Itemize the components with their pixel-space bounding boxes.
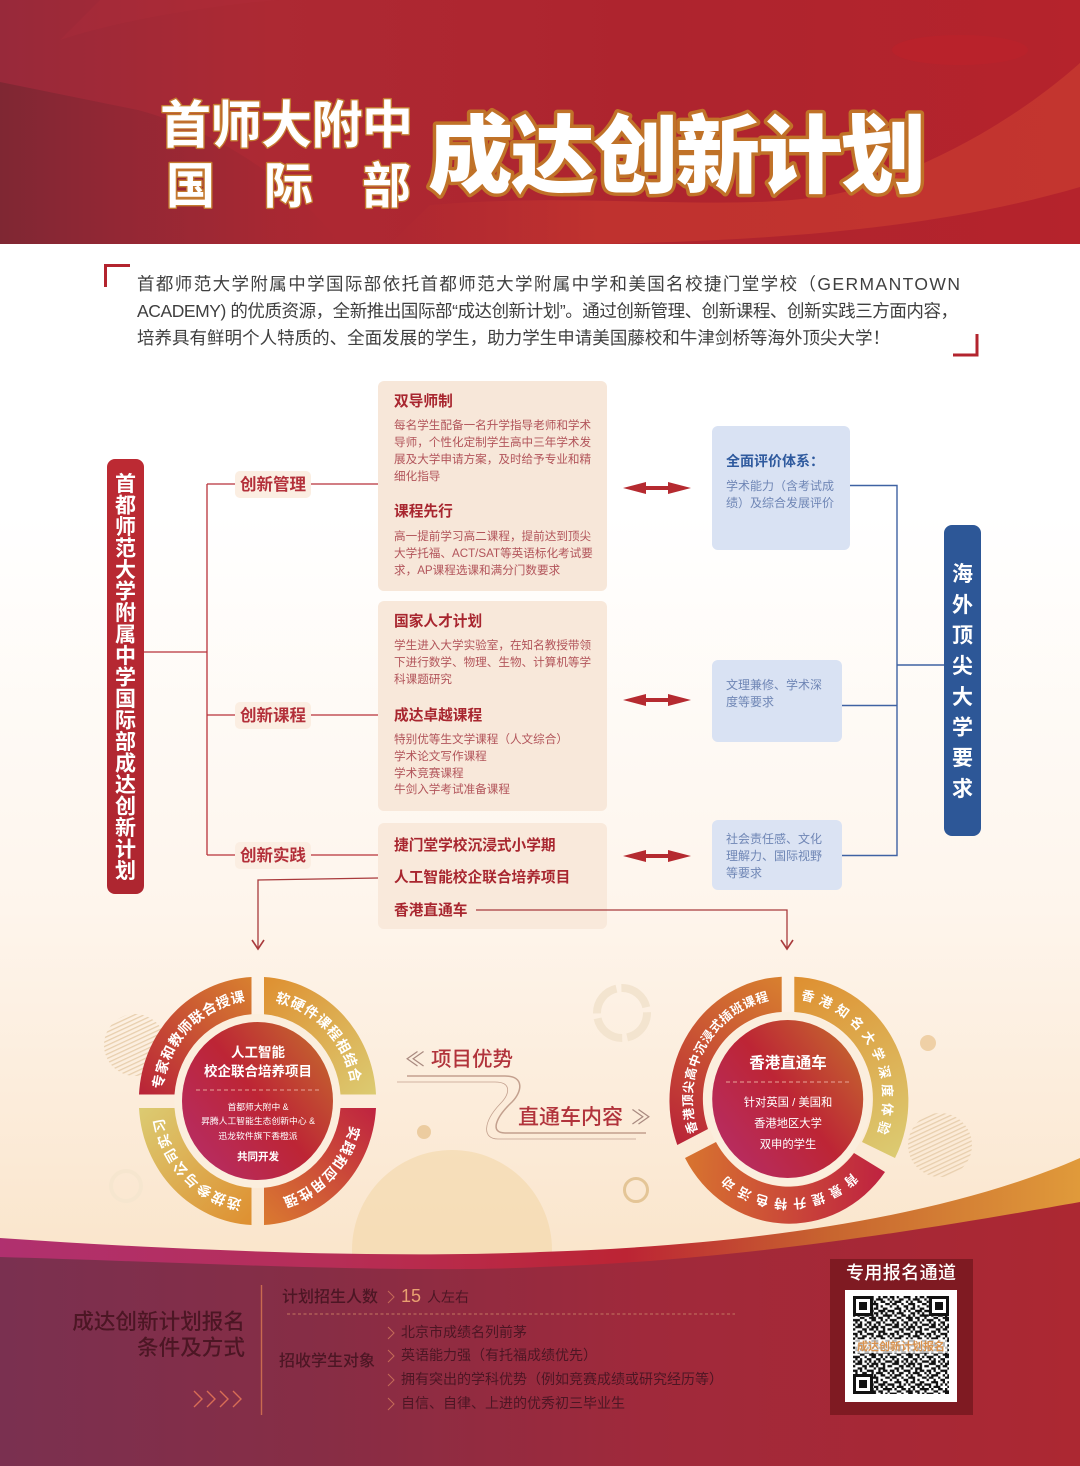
left vertical bar: 首都师范大学附属中学国际部成达创新计划 [115,473,136,883]
panel: 创新课程 content: 学术论文写作课程 [394,749,487,763]
target students: 招收学生对象 [279,1351,375,1370]
panel: 创新管理 content: 求，AP课程选课和满分门数要求 [394,563,561,577]
middle heading: 项目优势: 项目优势 [431,1048,513,1071]
chevrons [194,1391,241,1407]
center disc: 人工智能 [231,1044,285,1060]
vertical divider [260,1285,262,1415]
panel: 全面评价体系: 绩）及综合发展评价 [726,495,834,510]
panel: 创新课程 content: 学生进入大学实验室，在知名教授带领 [394,638,592,652]
panel: 社会责任感: 社会责任感、文化 [726,831,822,846]
panel: 创新管理 content [378,381,607,591]
dotted divider [287,1313,735,1315]
panel: 全面评价体系: 学术能力（含考试成 [726,478,834,493]
center disc: 针对英国 / 美国和 [744,1095,832,1109]
right donut: 香港直通车 [669,976,908,1224]
target students: 英语能力强（有托福成绩优先） [401,1347,597,1363]
target students: 拥有突出的学科优势（例如竞赛成绩或研究经历等） [401,1371,723,1387]
double arrow 1 [623,482,691,494]
panel: 创新课程 content: 下进行数学、物理、生物、计算机等学 [394,655,591,669]
QR panel: 专用报名通道 [846,1263,956,1283]
label: 创新实践 [235,842,311,869]
segment: 专家和教师联合授课: 专家和教师联合授课 [152,990,245,1088]
panel: 创新课程 content: 特别优等生文学课程（人文综合） [394,732,568,746]
arrow: to right donut [476,910,793,949]
intro text block: 培养具有鲜明个人特质的、全面发展的学生，助力学生申请美国藤校和牛津剑桥等海外顶尖大学！ [137,328,890,348]
center disc: 昇腾人工智能生态创新中心 & [201,1115,315,1126]
panel: 创新管理 content: 课程先行 [394,503,453,520]
segment: 香港顶尖高中沉浸式插班课程 [669,976,782,1145]
intro text block: ACADEMY) 的优质资源，全新推出国际部“成达创新计划”。通过创新管理、创新课程、创新实践三方面内容， [137,301,958,321]
double arrow 2 [623,694,691,706]
center disc [182,1022,333,1180]
panel: 全面评价体系 [712,426,850,550]
panel: 创新课程 content: 科课题研究 [394,672,452,686]
segment: 软硬件课程相结合: 软硬件课程相结合 [276,991,362,1081]
label: 创新课程 [235,702,311,729]
segment: 选拔参与公司实习: 选拔参与公司实习 [152,1120,242,1212]
target students: 自信、自律、上进的优秀初三毕业生 [401,1395,625,1411]
panel: 社会责任感 [712,820,842,890]
panel: 创新实践 content: 捷门堂学校沉浸式小学期 [394,836,556,854]
intro text block: 首都师范大学附属中学国际部依托首都师范大学附属中学和美国名校捷门堂学校（GERMANTOWN [137,274,960,294]
panel: 文理兼修: 度等要求 [726,694,774,709]
label: 创新管理: 创新管理 [240,474,306,494]
title: school name: 国 [166,160,215,214]
segment: 实践和应用性强 [264,1108,376,1225]
middle curved divider [397,1076,646,1139]
footer [0,1158,1080,1466]
label: 创新实践: 创新实践 [240,845,306,865]
panel: 创新管理 content: 大学托福、ACT/SAT等英语标化考试要 [394,546,593,560]
center disc: 共同开发 [237,1150,279,1163]
panel: 创新实践 content: 人工智能校企联合培养项目 [394,868,570,886]
segment: 选拔参与公司实习 [139,1108,252,1225]
panel: 创新实践 content [378,823,607,929]
plan enrolment [282,1286,469,1306]
center disc: 首都师大附中 & [227,1101,289,1112]
plan enrolment: 15 [401,1286,421,1306]
center disc: 迅龙软件旗下香橙派 [218,1130,298,1141]
double arrow 3 [623,850,691,862]
panel: 创新管理 content: 每名学生配备一名升学指导老师和学术 [394,418,592,432]
segment: 香港知名大学深度体验: 香港知名大学深度体验 [802,990,894,1135]
right vertical bar: 海外顶尖大学要求 [952,563,973,801]
right connector tree [842,486,944,856]
right vertical bar [944,525,981,836]
label: 创新课程: 创新课程 [240,705,306,725]
panel: 文理兼修 [712,660,842,742]
registration heading: 条件及方式 [137,1335,245,1360]
left donut: 人工智能校企联合培养项目 [139,977,376,1225]
plan enrolment: 计划招生人数 [282,1288,378,1306]
registration heading [72,1309,245,1360]
panel: 创新管理 content: 展及大学申请方案，及时给予专业和精 [394,452,592,466]
middle heading: 项目优势: ≪ [405,1049,425,1071]
intro text block [137,274,960,348]
title: school name: 首师大附中 [160,97,413,154]
header banner [0,0,1080,244]
panel: 创新课程 content: 国家人才计划 [394,612,482,630]
title: school name [160,97,413,214]
segment: 背景提升特色活动 [685,1142,885,1224]
panel: 创新课程 content [378,601,607,811]
QR code: 成达创新计划报名 [857,1339,945,1353]
middle heading: 直通车内容: ≫ [631,1107,651,1129]
segment: 香港顶尖高中沉浸式插班课程: 香港顶尖高中沉浸式插班课程 [682,990,769,1134]
left connector tree [144,484,378,855]
left vertical bar [107,459,144,894]
segment: 软硬件课程相结合 [264,977,376,1094]
target students: 北京市成绩名列前茅 [401,1324,527,1340]
panel: 创新课程 content: 学术竞赛课程 [394,766,464,780]
registration heading: 成达创新计划报名 [72,1309,245,1334]
panel: 创新管理 content: 导师，个性化定制学生高中三年学术发 [394,435,592,449]
panel: 创新管理 content: 高一提前学习高二课程，提前达到顶尖 [394,529,592,543]
panel: 社会责任感: 等要求 [726,866,762,880]
center disc: 香港地区大学 [754,1116,822,1130]
target students [279,1324,723,1411]
panel: 全面评价体系: 全面评价体系： [726,453,824,469]
QR panel [830,1259,973,1415]
segment: 实践和应用性强: 实践和应用性强 [282,1126,360,1208]
panel: 创新管理 content: 双导师制 [394,393,453,410]
center disc [712,1020,863,1178]
title: school name: 际 [264,160,313,214]
middle heading: 直通车内容: 直通车内容 [518,1106,623,1129]
panel: 创新课程 content: 成达卓越课程 [394,706,482,724]
panel: 创新实践 content: 香港直通车 [394,901,467,919]
QR code [853,1296,949,1394]
panel: 社会责任感: 理解力、国际视野 [726,848,822,863]
panel: 创新管理 content: 细化指导 [394,469,440,483]
title: 成达创新计划: 成达创新计划 [428,110,926,205]
panel: 文理兼修: 文理兼修、学术深 [726,677,822,692]
panel: 创新课程 content: 牛剑入学考试准备课程 [394,782,510,796]
segment: 背景提升特色活动: 背景提升特色活动 [722,1173,858,1210]
title: school name: 部 [362,160,411,214]
plan enrolment: 人左右 [427,1289,469,1305]
center disc: 双申的学生 [760,1137,816,1151]
center disc: 校企联合培养项目 [204,1063,312,1079]
center disc: 香港直通车 [749,1053,827,1072]
arrow: to left donut [252,878,378,949]
label: 创新管理 [235,471,311,498]
decorative background shapes [104,988,972,1350]
intro brackets [106,266,977,355]
